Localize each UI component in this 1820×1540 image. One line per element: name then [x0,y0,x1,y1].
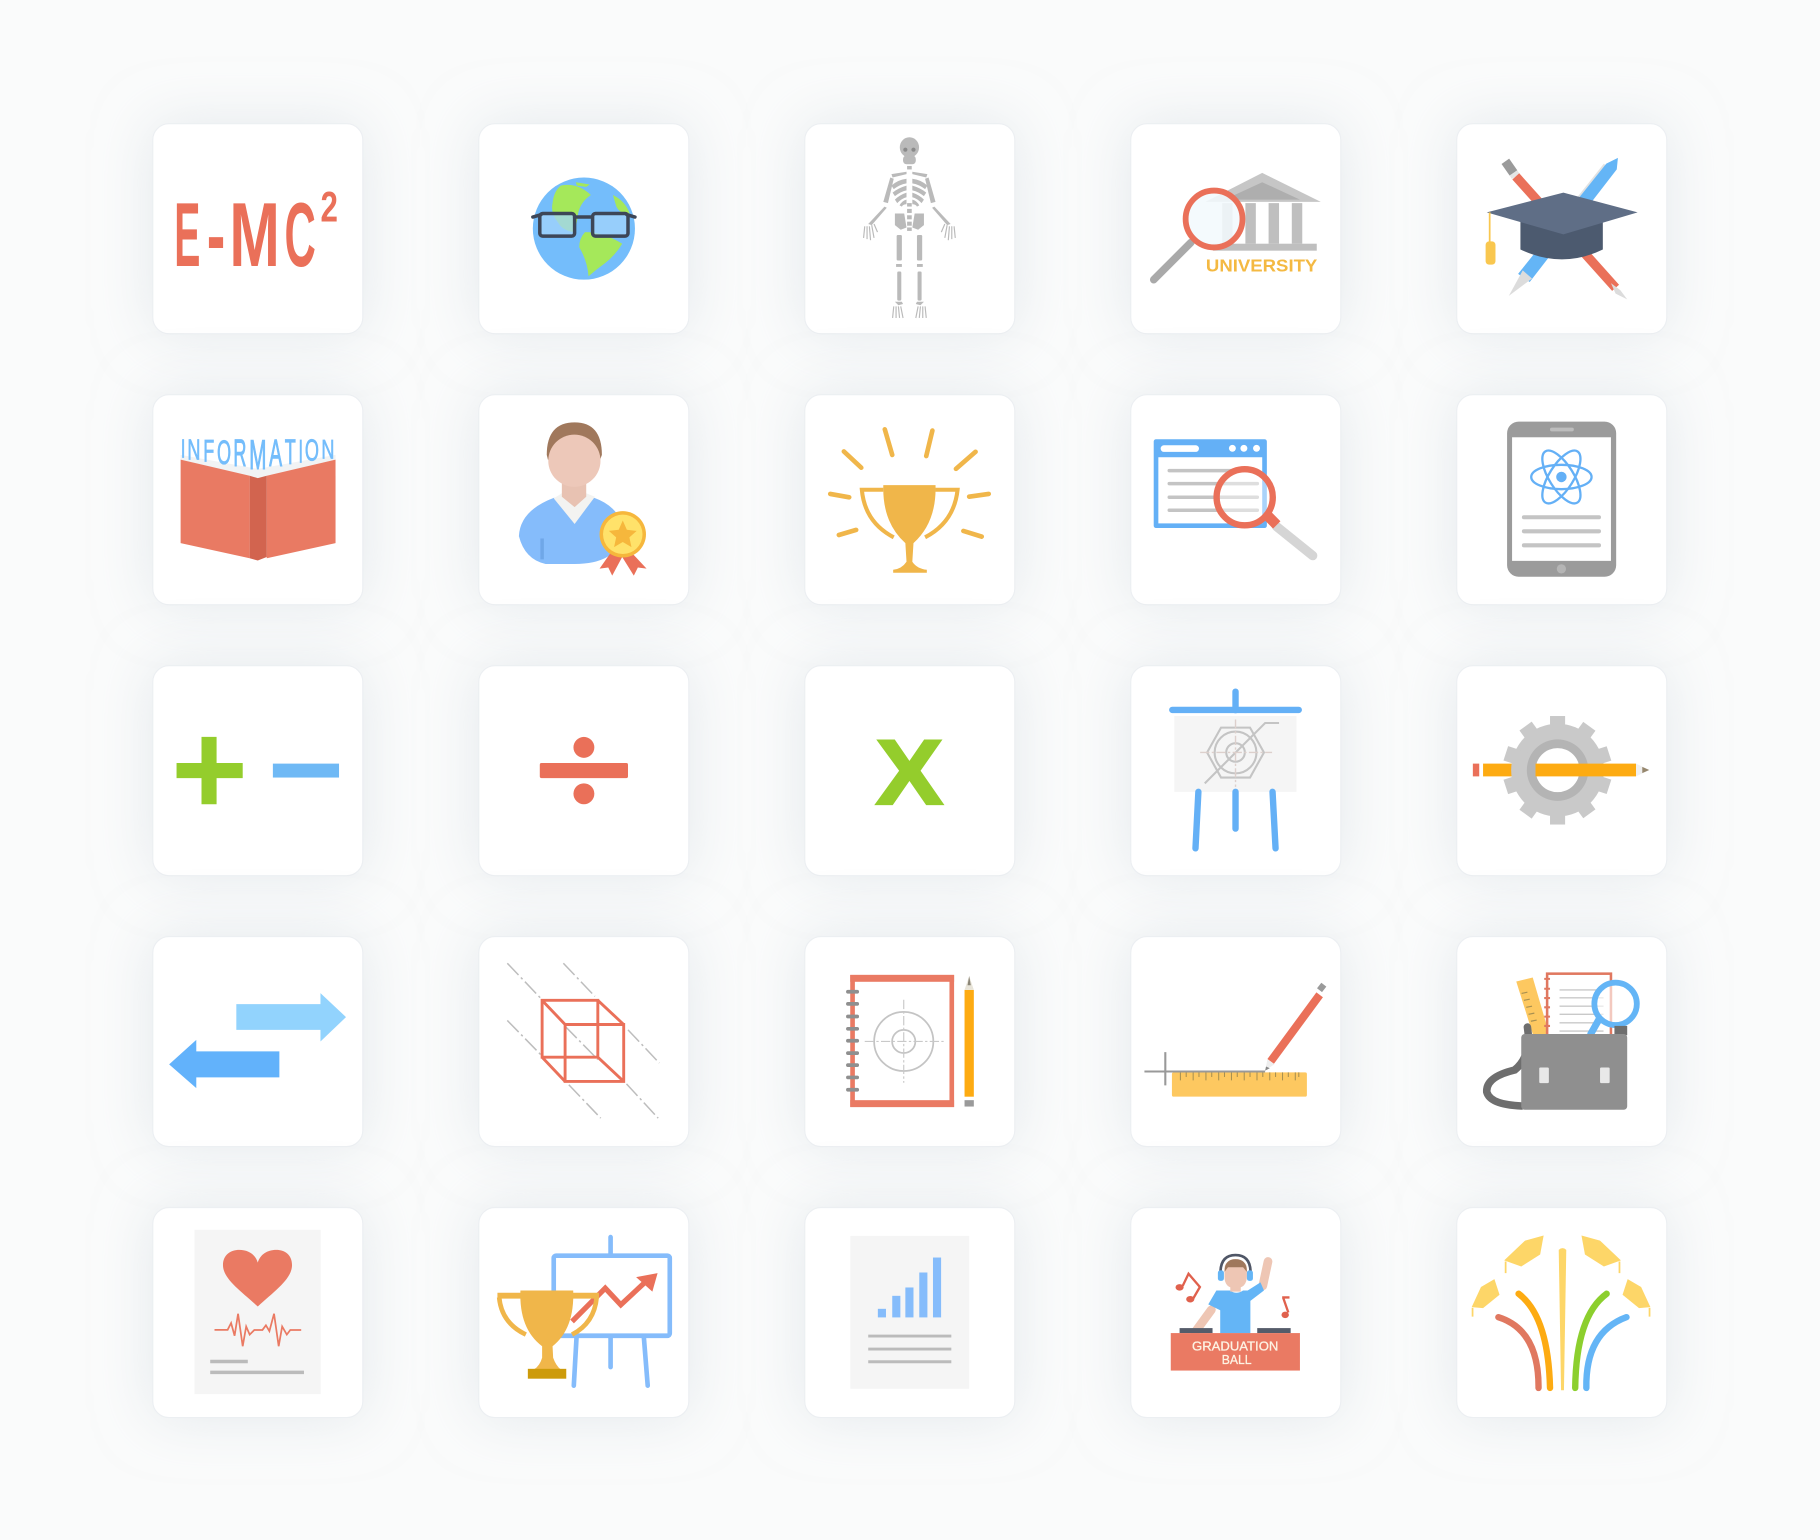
card: graduation cap and pencils [1457,124,1667,334]
information text: R [233,433,246,475]
icon: trophy [497,1290,599,1379]
card: person with medal [479,395,689,605]
card: E-MC2 [153,124,363,334]
icon: easel [1172,692,1299,848]
icon: divide sign [540,737,628,804]
icon: browser window [1154,439,1267,528]
icon: DJ desk: GRADUATION [1192,1338,1278,1353]
text lines [868,1336,951,1362]
card: ruler and pencil [1131,937,1341,1147]
icon: university building [1205,173,1321,251]
icon: tablet [1507,422,1616,577]
icon: gear [1473,716,1611,825]
icon: music notes [1176,1274,1289,1318]
arrow: left [169,1040,279,1088]
formula text: - [207,185,225,286]
arrow: right [236,993,346,1041]
icon: minus [273,764,339,778]
card: multiply [805,666,1015,876]
card: easel with blueprint [1131,666,1341,876]
icon: notebook [848,975,954,1107]
icon: medal [600,511,647,576]
icon: magnifier [1154,191,1242,280]
icon: heartbeat line [215,1314,301,1346]
icon: report page [850,1236,969,1389]
icon: pencil [1265,985,1325,1071]
card: trophy and chart board [479,1208,689,1418]
icon: bag [1487,1026,1627,1110]
icon: flying caps [1472,1235,1650,1317]
formula text: C [284,185,316,286]
icon: bag contents [1516,974,1637,1043]
icon: dashed projection lines [507,963,659,1118]
university label: UNIVERSITY [1206,256,1317,276]
information text: O [305,434,319,468]
formula text: 2 [320,184,338,232]
icon: DJ desk: BALL [1222,1352,1252,1367]
icon: pencil [1536,764,1649,776]
card: exchange arrows [153,937,363,1147]
icon: skeleton [864,137,955,318]
card: skeleton [805,124,1015,334]
formula text [174,184,338,286]
icon: graduation cap [1486,193,1638,265]
card: browser search [1131,395,1341,605]
card: university search [1131,124,1341,334]
card: notebook and pencil [805,937,1015,1147]
icon: atom [1531,445,1592,509]
card: heart report [153,1208,363,1418]
icon: hexagon drawing [1200,720,1279,787]
card: wireframe cube [479,937,689,1147]
icon: globe [533,178,635,280]
card: divide [479,666,689,876]
card: trophy with rays [805,395,1015,605]
card: globe with glasses [479,124,689,334]
information text: I [181,434,185,464]
icon: crossed pencil and pen [1505,158,1627,299]
card: information book [153,395,363,605]
card: bar chart report [805,1208,1015,1418]
icon: ruler [1144,1052,1307,1097]
information text: N [187,434,200,466]
card: school bag [1457,937,1667,1147]
icon: firework trails [1498,1248,1627,1390]
icon: report page [194,1230,321,1394]
icon: magnifier [1217,469,1313,556]
icon: multiply sign: X [876,722,943,824]
information text: F [203,435,214,469]
icon: chart board [554,1237,670,1386]
card: tablet with atom [1457,395,1667,605]
card: gear and pencil [1457,666,1667,876]
information text: T [285,433,296,472]
card: graduation ball [1131,1208,1341,1418]
icon: open book [181,455,336,561]
formula text: E [174,185,200,286]
text lines [210,1362,304,1372]
icon: DJ desk [1171,1328,1300,1371]
icon: plus [177,737,243,804]
icon: DJ [1195,1255,1268,1333]
information text: A [269,433,282,475]
bar chart [878,1258,941,1317]
card: graduation fireworks [1457,1208,1667,1418]
formula text: M [229,185,280,286]
icon: pencil [965,976,974,1107]
icon: heart [223,1250,292,1307]
icon: cube [542,1000,624,1081]
information text: M [249,431,266,478]
information text: O [217,433,231,471]
icon: person [519,422,623,564]
card: plus and minus [153,666,363,876]
icon: trophy [830,429,989,573]
information text: N [321,434,334,464]
information text: I [298,435,303,470]
information text [181,431,334,478]
